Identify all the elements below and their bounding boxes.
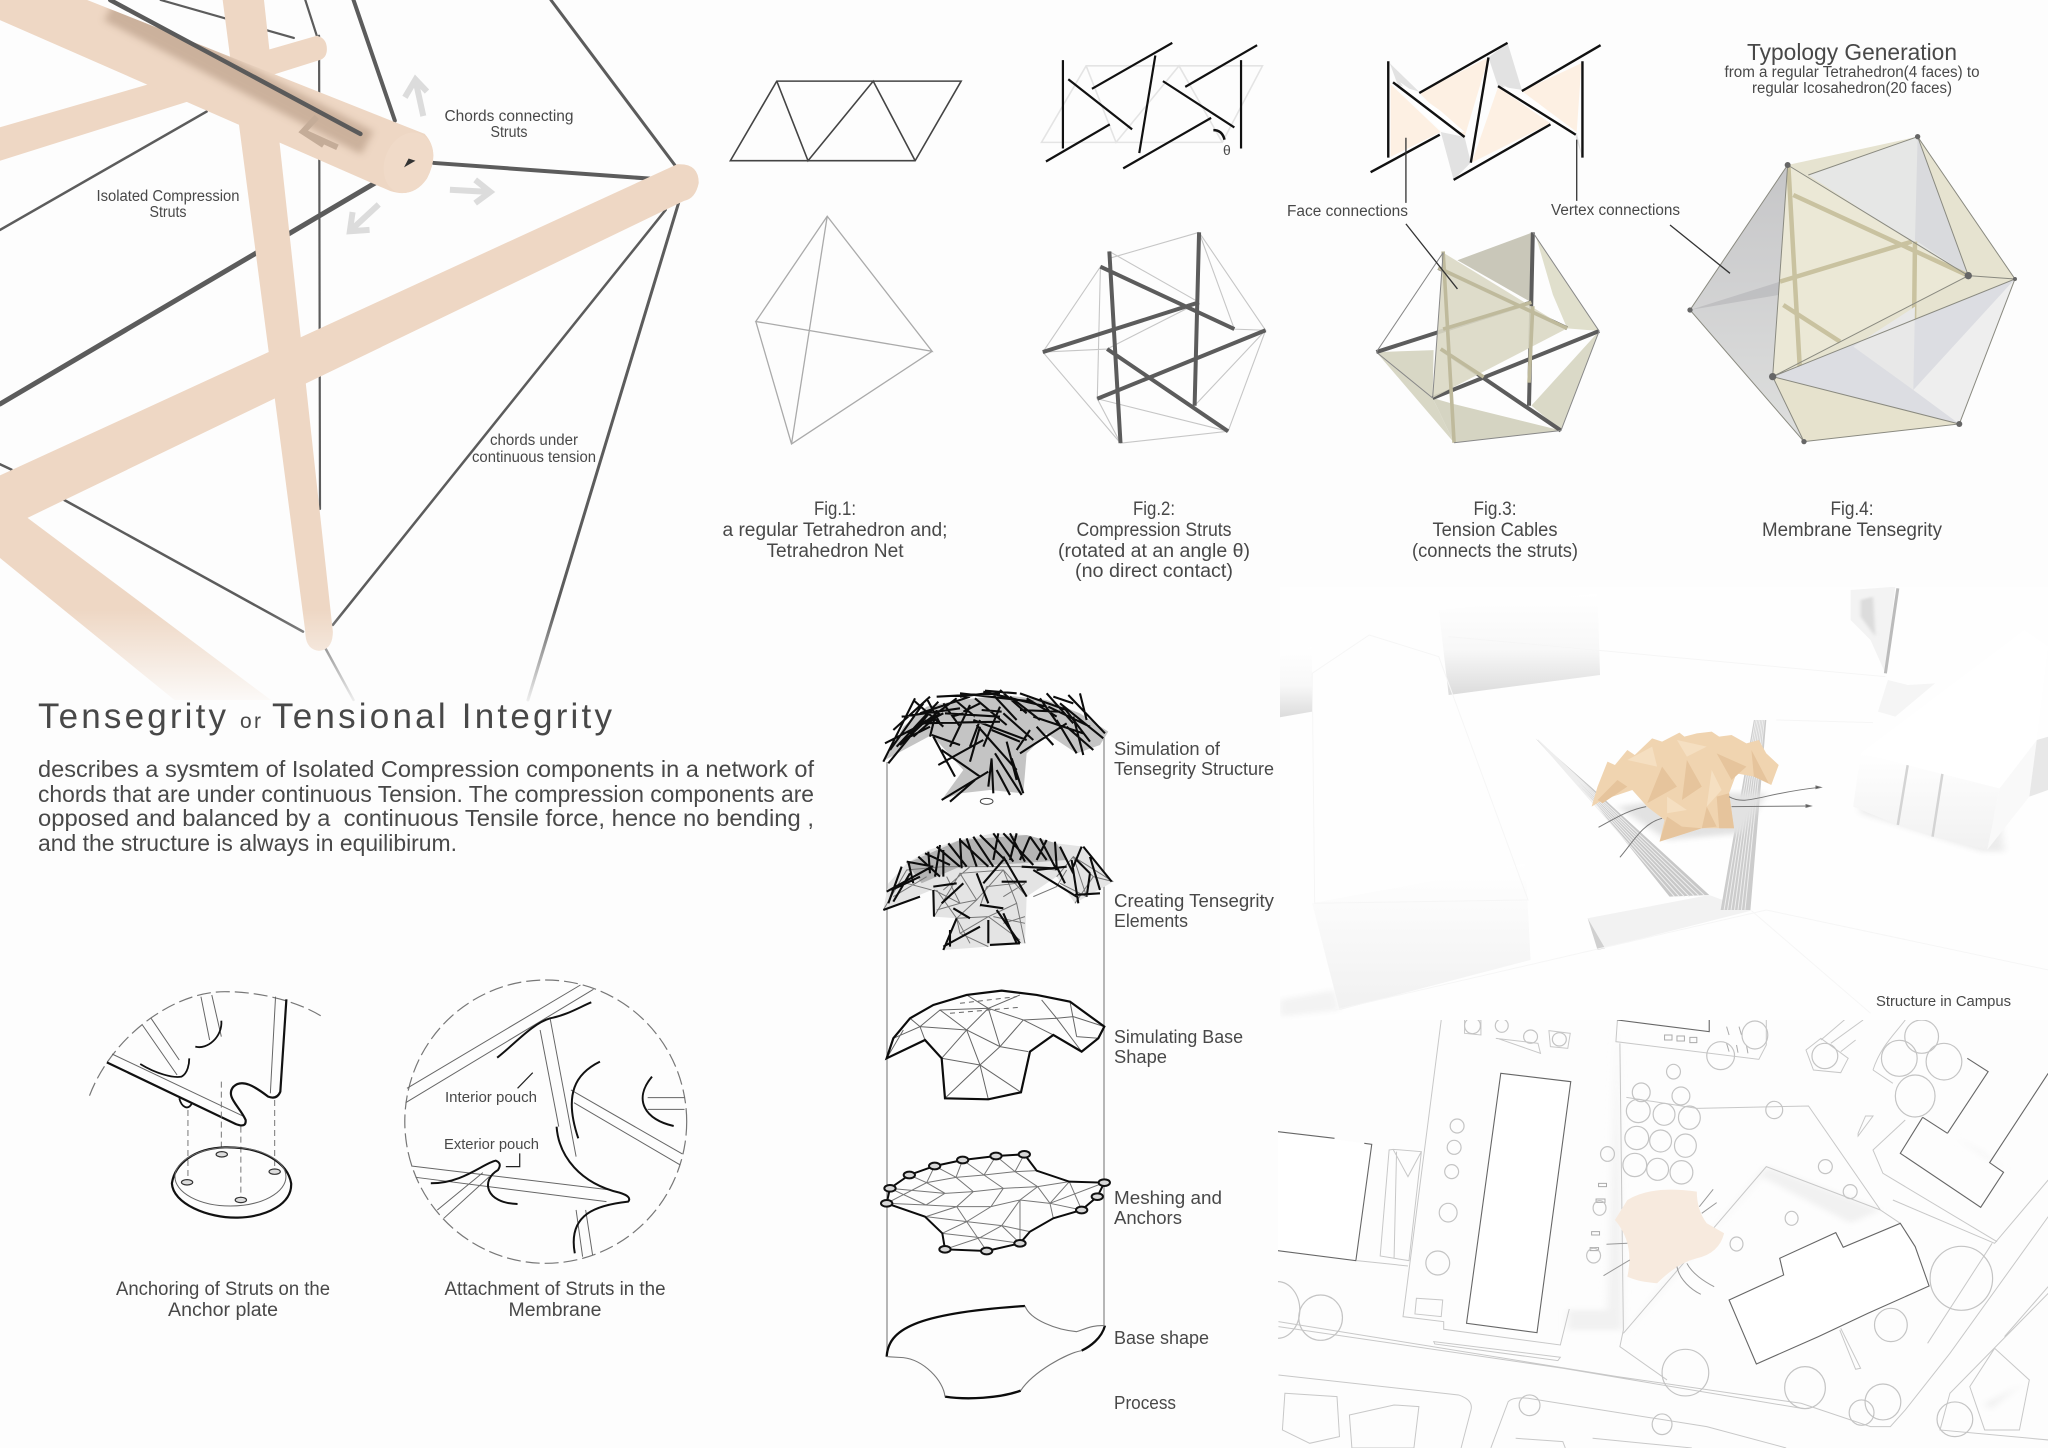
caption line: Tetrahedron Net — [766, 541, 904, 562]
building massing — [1280, 587, 2048, 1017]
label: simulating base shape — [1114, 1026, 1243, 1067]
white building roofs — [1467, 1073, 1571, 1333]
chord on foreground strut — [110, 0, 360, 134]
title — [38, 697, 612, 736]
trees — [1255, 1018, 1993, 1437]
label: meshing and anchors: Anchors — [1114, 1207, 1182, 1228]
campus ground lines — [1278, 1017, 2048, 1448]
caption: figure 4: Fig.4: — [1830, 499, 1874, 520]
description paragraph: and the structure is always in equilibirum. — [38, 830, 457, 856]
label: simulation of tensegrity structure: Simulation of — [1114, 738, 1221, 759]
tube shading — [110, 9, 442, 200]
label: meshing and anchors — [1114, 1187, 1222, 1228]
label: simulation of tensegrity structure — [1114, 738, 1274, 779]
label: continuous tension: continuous tension — [472, 449, 596, 466]
stage: simulating base shape — [887, 991, 1104, 1099]
label: structure in campus: Structure in Campus — [1876, 993, 2011, 1010]
label: face connections: Face connections — [1287, 203, 1408, 220]
tetrahedron net — [730, 81, 961, 161]
label: creating tensegrity elements: Elements — [1114, 910, 1188, 931]
label: meshing and anchors: Meshing and — [1114, 1187, 1222, 1208]
icosahedron — [1670, 134, 2017, 444]
panel: figure 3 — [1287, 43, 1680, 562]
stage: creating tensegrity elements — [883, 833, 1113, 950]
stage: simulation of tensegrity structure — [883, 690, 1108, 804]
caption: attachment: Attachment of Struts in the — [444, 1279, 666, 1300]
circulation arrows — [1604, 1189, 1717, 1294]
panel: figure 4 membrane tensegrity — [1670, 39, 2017, 541]
circulation arrows — [1599, 786, 1821, 857]
caption line: Tension Cables — [1432, 520, 1558, 541]
label: base shape: Base shape — [1114, 1327, 1209, 1348]
caption line: a regular Tetrahedron and; — [722, 520, 948, 541]
render background — [1280, 587, 2048, 1020]
anchor plate — [172, 1147, 291, 1218]
panel: figure 2 — [1041, 43, 1266, 582]
regular tetrahedron — [756, 216, 932, 444]
title: or — [240, 710, 261, 733]
label: vertex connections: Vertex connections — [1551, 202, 1680, 219]
panel: attachment detail — [405, 980, 687, 1321]
panel: anchoring detail — [89, 992, 330, 1321]
caption line: Membrane — [508, 1300, 602, 1321]
rotated struts on net — [1041, 43, 1262, 168]
caption line: Membrane Tensegrity — [1762, 520, 1942, 541]
structure footprint — [1615, 1190, 1724, 1283]
soft building shadows — [1570, 1170, 1996, 1404]
angle label: θ — [1223, 142, 1231, 158]
net with faces — [1371, 43, 1601, 203]
strut end socket — [404, 158, 415, 167]
guide lines — [887, 735, 1104, 1357]
label: simulating base shape: Shape — [1114, 1046, 1167, 1067]
tension cable tetrahedral form — [1376, 224, 1599, 443]
caption line: (connects the struts) — [1412, 541, 1578, 562]
label: struts: Struts — [150, 204, 187, 221]
struts and pouches — [406, 985, 685, 1257]
label: exterior pouch: Exterior pouch — [444, 1136, 539, 1153]
label: chords connecting struts: Chords connecting — [444, 108, 574, 125]
panel: figure 1 — [722, 81, 961, 562]
caption line: Compression Struts — [1076, 520, 1232, 541]
description paragraph — [38, 756, 815, 856]
stage: base shape — [887, 1306, 1105, 1398]
shadow under structure — [1617, 793, 1766, 840]
title: Tensional Integrity — [272, 697, 612, 736]
chords under tension — [0, 0, 679, 700]
label: creating tensegrity elements: Creating Tensegrity — [1114, 890, 1275, 911]
compression struts in tetrahedral form — [1043, 232, 1266, 443]
description paragraph: opposed and balanced by a continuous Tensile force, hence no bending , — [38, 805, 814, 831]
panel: tensegrity close-up render — [0, 0, 720, 710]
dashed detail circle — [405, 980, 687, 1263]
description paragraph: chords that are under continuous Tension. The compression components are — [38, 781, 814, 807]
label: process: Process — [1114, 1392, 1176, 1413]
bottom fade of render — [0, 610, 720, 710]
steps — [1536, 720, 1766, 910]
title: Tensegrity — [38, 697, 226, 736]
subheading line: from a regular Tetrahedron(4 faces) to — [1724, 64, 1980, 81]
caption line: (rotated at an angle θ) — [1058, 541, 1250, 562]
label: creating tensegrity elements — [1114, 890, 1275, 931]
strut and membrane — [107, 995, 286, 1200]
subheading line: regular Icosahedron(20 faces) — [1752, 80, 1952, 97]
caption line: Anchor plate — [168, 1300, 278, 1321]
label: chords under: chords under — [490, 432, 578, 449]
dashed detail boundary — [89, 992, 325, 1096]
caption: figure 1: Fig.1: — [814, 499, 856, 520]
label: interior pouch: Interior pouch — [445, 1089, 537, 1106]
label: struts: Struts — [490, 124, 528, 141]
caption: figure 2: Fig.2: — [1133, 499, 1175, 520]
force arrows — [303, 79, 490, 231]
caption line: (no direct contact) — [1075, 561, 1233, 582]
panel: campus render — [1280, 587, 2048, 1020]
caption: anchoring: Anchoring of Struts on the — [116, 1279, 330, 1300]
label: isolated compression struts: Isolated Compression — [96, 188, 240, 205]
building outlines — [1277, 1020, 2048, 1364]
description paragraph: describes a sysmtem of Isolated Compression components in a network of — [38, 756, 815, 782]
tensile membrane structure — [1592, 732, 1779, 842]
label: simulating base shape: Simulating Base — [1114, 1026, 1243, 1047]
heading: typology generation: Typology Generation — [1747, 39, 1957, 65]
panel: process diagram — [881, 690, 1275, 1413]
label: simulation of tensegrity structure: Tensegrity Structure — [1114, 758, 1274, 779]
stage: meshing and anchors — [881, 1151, 1110, 1254]
caption: figure 3: Fig.3: — [1474, 499, 1516, 520]
isolated compression struts — [0, 0, 699, 700]
panel: site plan — [1255, 1017, 2048, 1448]
